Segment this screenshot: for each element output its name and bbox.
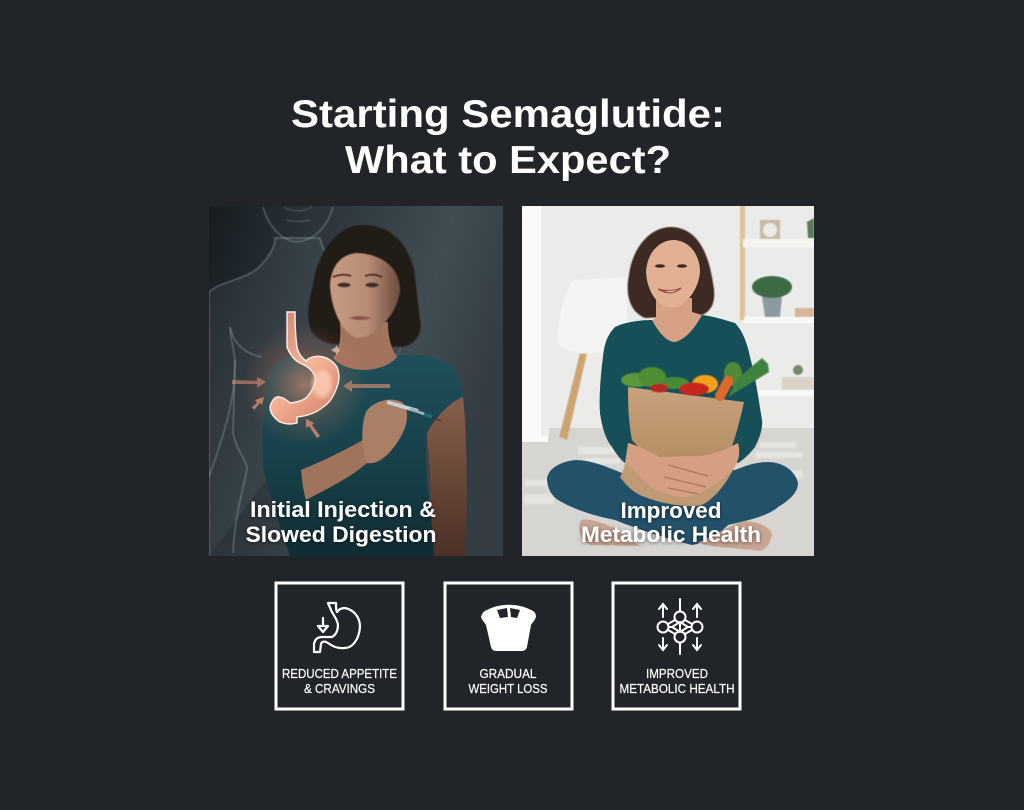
woman: jeans <box>547 460 798 545</box>
card: reduced appetite and cravings <box>276 583 403 709</box>
floor <box>522 428 814 556</box>
stomach glow <box>250 329 362 442</box>
title: What to Expect? <box>345 139 671 182</box>
icon: molecule network with arrows <box>658 599 702 654</box>
card label <box>468 667 548 696</box>
woman: facial features <box>333 275 382 320</box>
stomach <box>270 312 339 424</box>
panel: initial injection and slowed digestion <box>209 206 503 556</box>
icon: bathroom scale <box>481 605 536 651</box>
woman: hair <box>308 225 421 347</box>
card label: IMPROVED <box>646 667 708 681</box>
chair <box>557 277 628 438</box>
card: gradual weight loss <box>445 583 572 709</box>
woman: feet <box>579 519 772 551</box>
title <box>291 93 725 182</box>
digestion arrows <box>232 345 390 438</box>
panel caption: Initial Injection & <box>250 497 436 522</box>
card label: REDUCED APPETITE <box>282 667 397 681</box>
grocery bag <box>628 387 744 457</box>
panel: improved metabolic health <box>522 206 814 556</box>
woman: neck and chest <box>333 322 397 370</box>
card label: WEIGHT LOSS <box>468 682 548 696</box>
panel caption: Slowed Digestion <box>246 522 436 547</box>
arms and hands <box>625 443 739 497</box>
grocery bag lower <box>620 463 734 506</box>
panel caption <box>581 498 761 547</box>
card label <box>282 667 397 696</box>
woman: sweater <box>600 315 762 463</box>
card label: METABOLIC HEALTH <box>620 682 734 696</box>
card label: & CRAVINGS <box>304 682 375 696</box>
floor light streaks <box>524 442 803 504</box>
panel caption: Improved <box>620 498 722 523</box>
woman: bare right arm <box>427 397 467 556</box>
card: improved metabolic health <box>613 583 740 709</box>
woman: face and neck <box>646 240 702 342</box>
woman: shirt <box>263 355 463 556</box>
card label: GRADUAL <box>480 667 537 681</box>
panel caption <box>246 497 436 547</box>
title: Starting Semaglutide: <box>291 93 725 136</box>
vegetables <box>621 358 769 397</box>
woman: face <box>330 253 400 338</box>
translucent body outline <box>209 207 404 556</box>
panel caption: Metabolic Health <box>581 522 761 547</box>
curtain <box>522 206 549 442</box>
icon: stomach with down arrow <box>314 603 360 652</box>
shelving <box>740 206 814 396</box>
card label <box>620 667 734 696</box>
woman: forearm and hand with syringe <box>301 400 441 500</box>
woman: hair <box>628 227 714 318</box>
